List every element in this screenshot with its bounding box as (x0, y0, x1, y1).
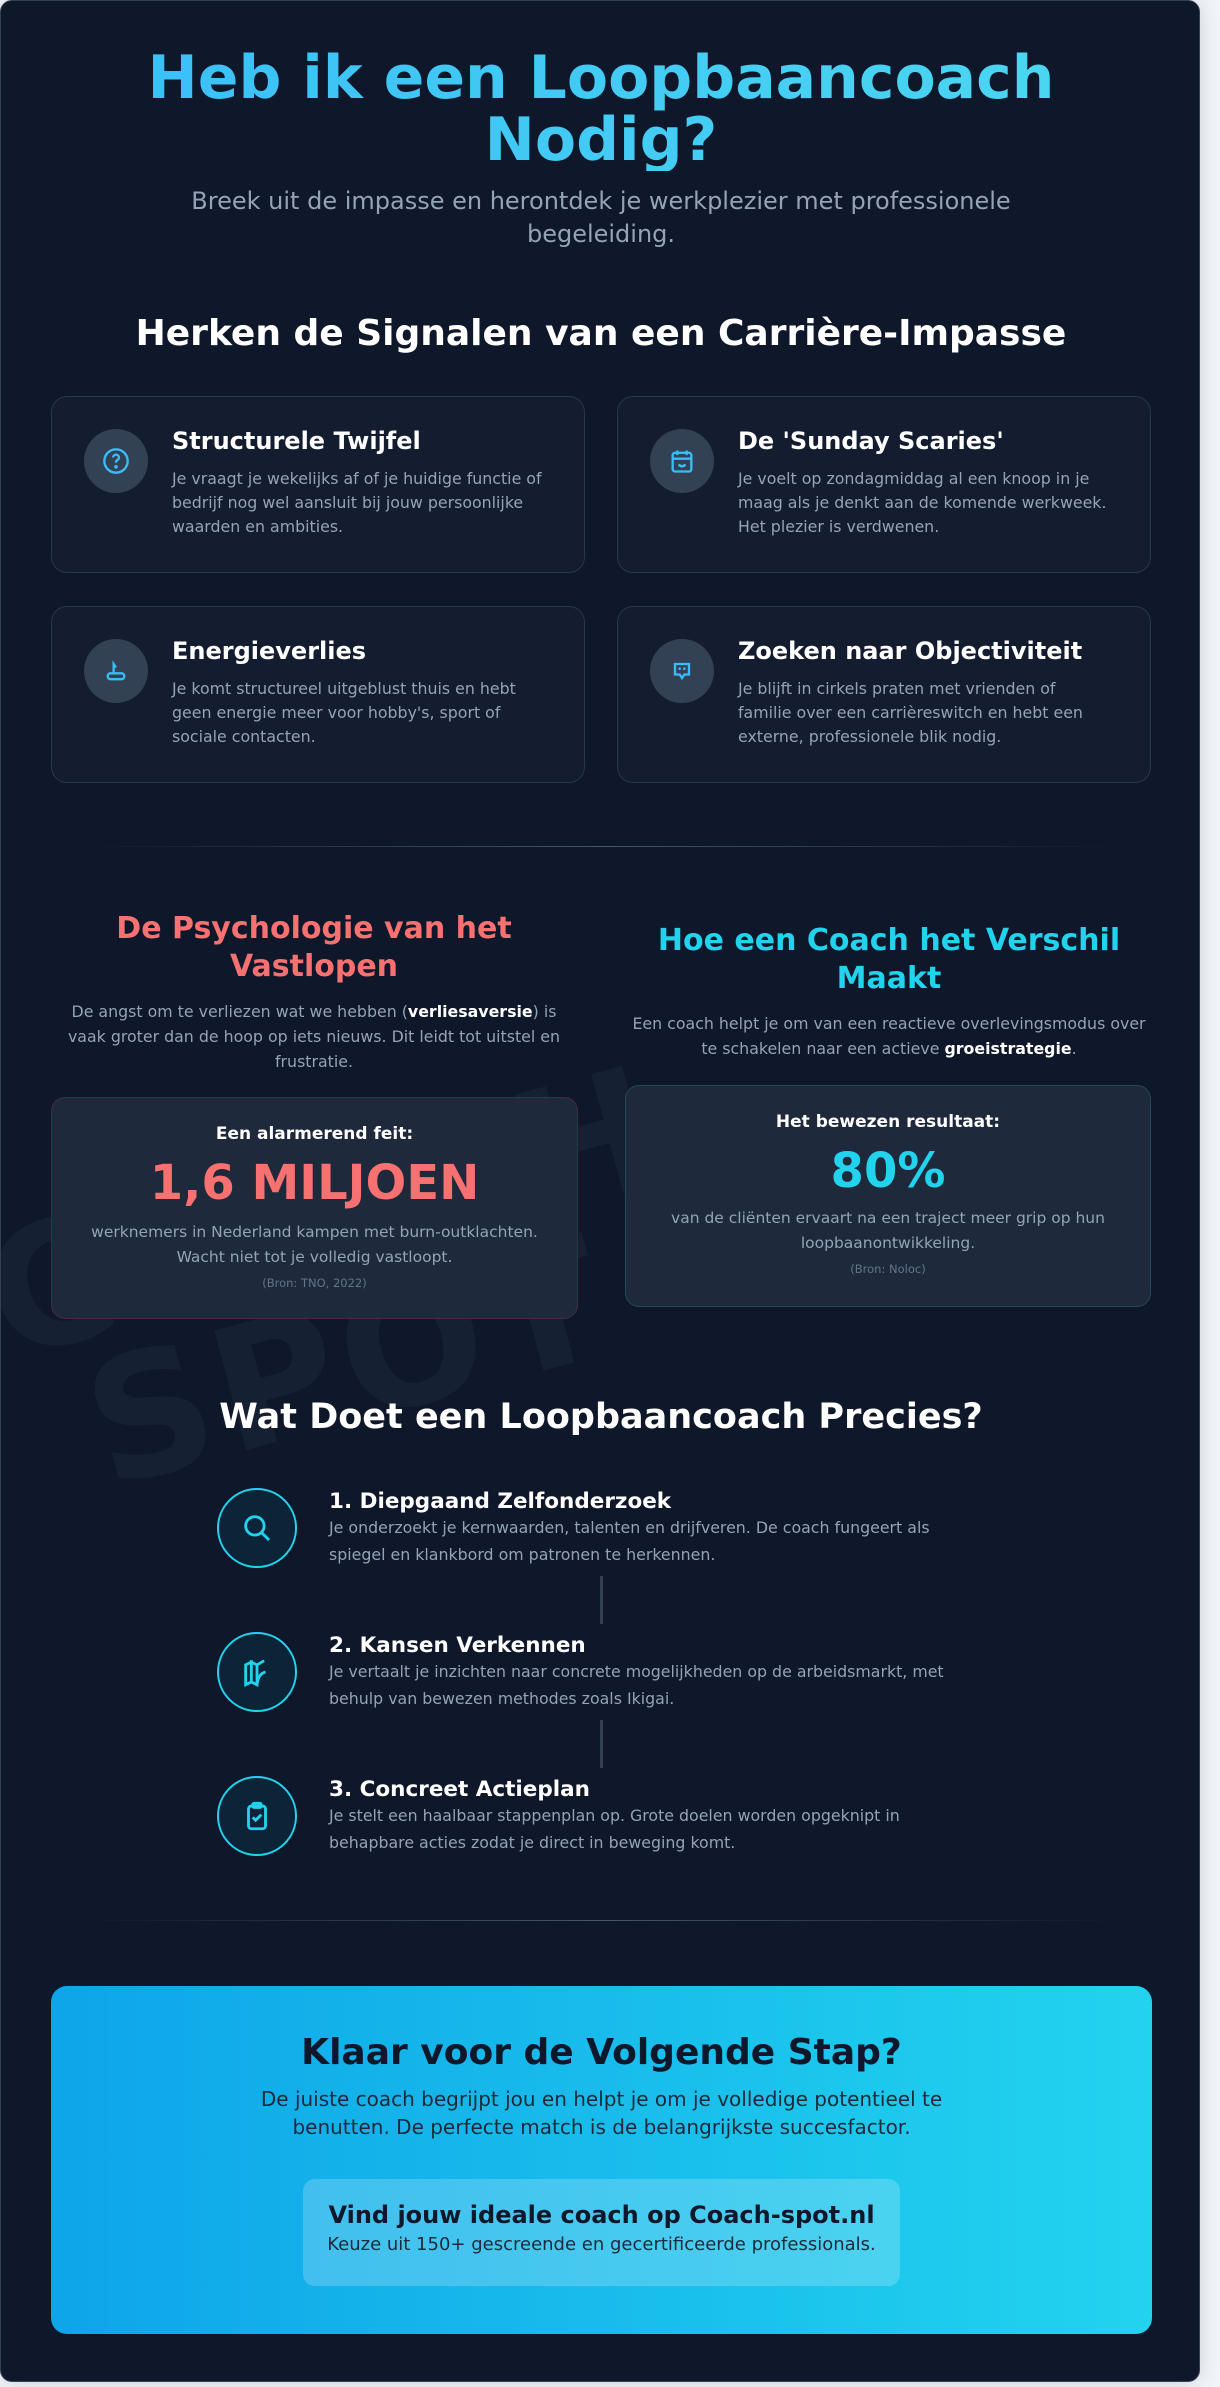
description: van de cliënten ervaart na een traject meer grip op hun (671, 1209, 1105, 1227)
icon: question (84, 429, 148, 493)
big number: 80% (831, 1143, 945, 1199)
source: (Bron: Noloc) (850, 1262, 926, 1276)
label: Een alarmerend feit: (216, 1124, 413, 1144)
label: Het bewezen resultaat: (776, 1112, 1000, 1132)
card: Energieverlies: Energieverlies (172, 637, 366, 665)
CTA text: De juiste coach begrijpt jou en helpt je om je volledige potentieel te benutten. De perfecte match is de belangrijkste succesfactor. (261, 2087, 942, 2139)
CTA button: Vind jouw ideale coach op Coach-spot.nl (328, 2201, 875, 2229)
step 3 (217, 1776, 900, 1856)
icon: chat (650, 639, 714, 703)
description: loopbaanontwikkeling. (801, 1234, 975, 1252)
icon: battery (84, 639, 148, 703)
card: Objectiviteit: Zoeken naar Objectiviteit (738, 637, 1082, 665)
heading: coach verschil: Hoe een Coach het Verschil Maakt (658, 923, 1120, 996)
heading: wat doet: Wat Doet een Loopbaancoach Precies? (219, 1397, 983, 1437)
title (1, 47, 1201, 171)
step 1: 1. Diepgaand Zelfonderzoek (329, 1489, 671, 1514)
card: Objectiviteit (617, 606, 1151, 783)
step 1 (217, 1488, 930, 1568)
step 1: Je onderzoekt je kernwaarden, talenten en drijfveren. De coach fungeert als spiegel en klankbord om patronen te herkennen. (329, 1518, 930, 1564)
stat box: 1,6 miljoen (51, 1097, 578, 1319)
card: Structurele Twijfel: Structurele Twijfel (172, 427, 421, 455)
CTA panel (51, 1986, 1152, 2334)
card: Energieverlies (51, 606, 585, 783)
icon: clipboard (217, 1776, 297, 1856)
card: Sunday Scaries: Je voelt op zondagmiddag al een knoop in je maag als je denkt aan de komende werkweek. Het plezier is verdwenen. (738, 469, 1106, 536)
heading: psychologie: De Psychologie van het Vastlopen (116, 911, 512, 984)
card: Sunday Scaries (617, 396, 1151, 573)
description: werknemers in Nederland kampen met burn-outklachten. (91, 1223, 538, 1241)
CTA heading: Klaar voor de Volgende Stap? (301, 2032, 902, 2073)
step 3: Je stelt een haalbaar stappenplan op. Grote doelen worden opgeknipt in behapbare acties zodat je direct in beweging komt. (329, 1806, 900, 1852)
step 2: Je vertaalt je inzichten naar concrete mogelijkheden op de arbeidsmarkt, met behulp van bewezen methodes zoals Ikigai. (329, 1662, 944, 1708)
source: (Bron: TNO, 2022) (262, 1276, 367, 1290)
card: Sunday Scaries: De 'Sunday Scaries' (738, 427, 1004, 455)
step 3: 3. Concreet Actieplan (329, 1777, 590, 1802)
watermark: SPOT (67, 1198, 631, 1527)
step 2: 2. Kansen Verkennen (329, 1633, 586, 1658)
connector (600, 1720, 603, 1768)
title: Nodig? (485, 105, 717, 175)
card: Objectiviteit: Je blijft in cirkels praten met vrienden of familie over een carrièreswitch en hebt een externe, professionele blik nodig. (738, 679, 1083, 746)
CTA button (303, 2179, 900, 2286)
title: Heb ik een Loopbaancoach (148, 43, 1054, 113)
text: psychologie: De angst om te verliezen wat we hebben (verliesaversie) is vaak groter dan de hoop op iets nieuws. Dit leidt tot uitstel en frustratie. (68, 1002, 560, 1071)
card: Structurele Twijfel (51, 396, 585, 573)
icon: calendar (650, 429, 714, 493)
description (91, 1223, 538, 1266)
card: Energieverlies: Je komt structureel uitgeblust thuis en hebt geen energie meer voor hobby's, sport of sociale contacten. (172, 679, 516, 746)
description: Wacht niet tot je volledig vastloopt. (177, 1248, 452, 1266)
text: coach verschil: Een coach helpt je om van een reactieve overlevingsmodus over te schakelen naar een actieve groeistrategie. (632, 1014, 1146, 1058)
CTA button: Keuze uit 150+ gescreende en gecertificeerde professionals. (327, 2234, 876, 2255)
big number: 1,6 MILJOEN (150, 1155, 479, 1211)
icon: map (217, 1632, 297, 1712)
stat box: 80% (625, 1085, 1151, 1307)
subtitle: Breek uit de impasse en herontdek je werkplezier met professionele begeleiding. (191, 187, 1011, 248)
card: Structurele Twijfel: Je vraagt je wekelijks af of je huidige functie of bedrijf nog wel aansluit bij jouw persoonlijke waarden en ambities. (172, 469, 542, 536)
icon: search (217, 1488, 297, 1568)
step 2 (217, 1632, 944, 1712)
connector (600, 1576, 603, 1624)
description (671, 1209, 1105, 1252)
heading: signals: Herken de Signalen van een Carrière-Impasse (136, 313, 1066, 354)
